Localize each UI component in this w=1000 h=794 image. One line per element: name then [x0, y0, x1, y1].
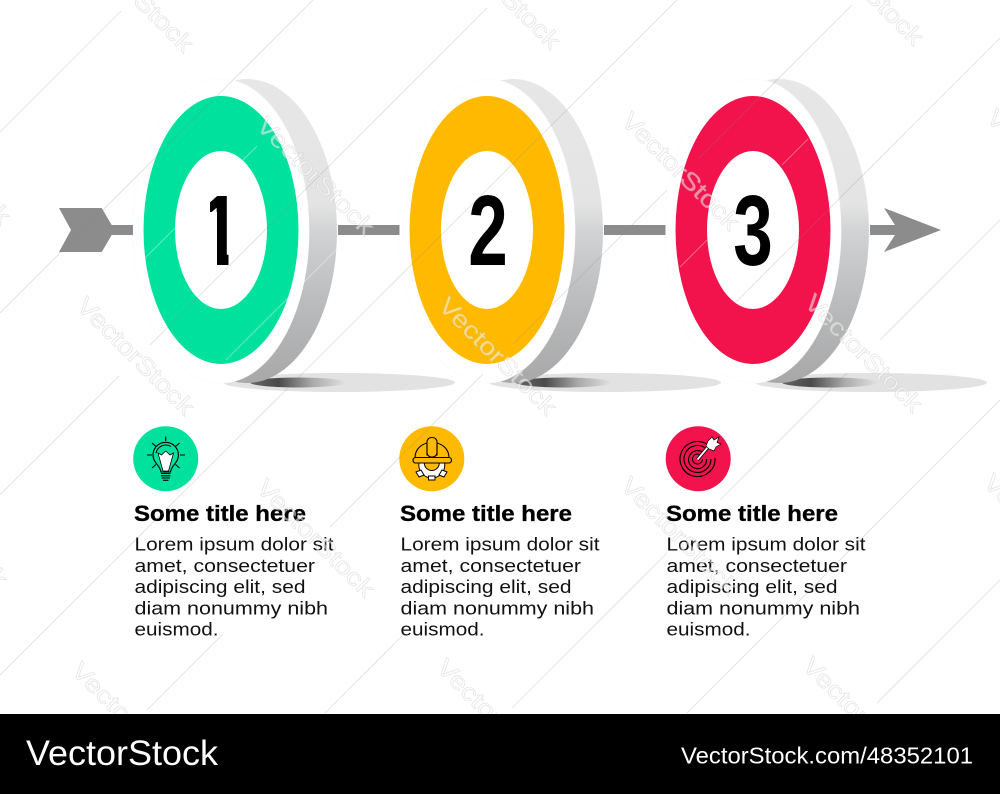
icon: helmet and gear	[399, 426, 464, 491]
watermark text: VectorStock	[71, 292, 200, 422]
text block: column 1: adipiscing elit, sed	[134, 577, 306, 597]
watermark text: VectorStock	[433, 292, 562, 422]
number 2: 2	[468, 175, 508, 287]
text block: column 3: adipiscing elit, sed	[666, 577, 838, 597]
icon: light bulb	[133, 426, 198, 491]
connector 1 to 2	[338, 225, 400, 235]
text block: column 1: euismod.	[134, 620, 218, 640]
watermark text: VectorStock	[615, 472, 744, 602]
text block: column 3: Lorem ipsum dolor sit	[666, 535, 866, 555]
text block: column 2: amet, consectetuer	[400, 556, 581, 576]
step 1 disc	[133, 79, 455, 392]
text block: column 2: euismod.	[400, 620, 484, 640]
text block: column 3: diam nonummy nibh	[666, 598, 860, 618]
watermark text: VectorStock	[799, 289, 928, 419]
icon: target and dart	[666, 426, 731, 491]
watermark text: VectorStock	[431, 654, 560, 784]
number 3: 3	[733, 175, 773, 287]
text block: column 1: diam nonummy nibh	[134, 598, 328, 618]
watermark text: VectorStock	[251, 474, 380, 604]
text block: column 2: adipiscing elit, sed	[400, 577, 572, 597]
text block: column 3	[666, 501, 866, 640]
step 3 disc	[665, 79, 987, 392]
footer image id: VectorStock.com/48352101	[681, 742, 973, 768]
number 1: 1	[199, 174, 241, 287]
footer bar	[0, 714, 1000, 794]
text block: column 1	[134, 501, 334, 640]
arrow tail	[59, 208, 133, 252]
footer logo: VectorStock	[26, 733, 218, 773]
text block: column 2: Lorem ipsum dolor sit	[400, 535, 600, 555]
watermark text: VectorStock	[616, 107, 745, 237]
text block: column 3: Some title here	[666, 501, 838, 526]
text block: column 1: Lorem ipsum dolor sit	[134, 535, 334, 555]
watermark text: VectorStock	[66, 657, 195, 787]
watermark text: VectorStock	[797, 652, 926, 782]
text block: column 1: amet, consectetuer	[134, 556, 315, 576]
text block: column 1: Some title here	[134, 501, 306, 526]
text block: column 2: diam nonummy nibh	[400, 598, 594, 618]
watermark text: VectorStock	[251, 112, 380, 242]
step 2 disc	[399, 79, 721, 392]
text block: column 3: amet, consectetuer	[666, 556, 847, 576]
text block: column 3: euismod.	[666, 620, 750, 640]
connector 2 to 3	[604, 225, 666, 235]
text block: column 2: Some title here	[400, 501, 572, 526]
arrow head	[870, 208, 941, 252]
text block: column 2	[400, 501, 600, 640]
